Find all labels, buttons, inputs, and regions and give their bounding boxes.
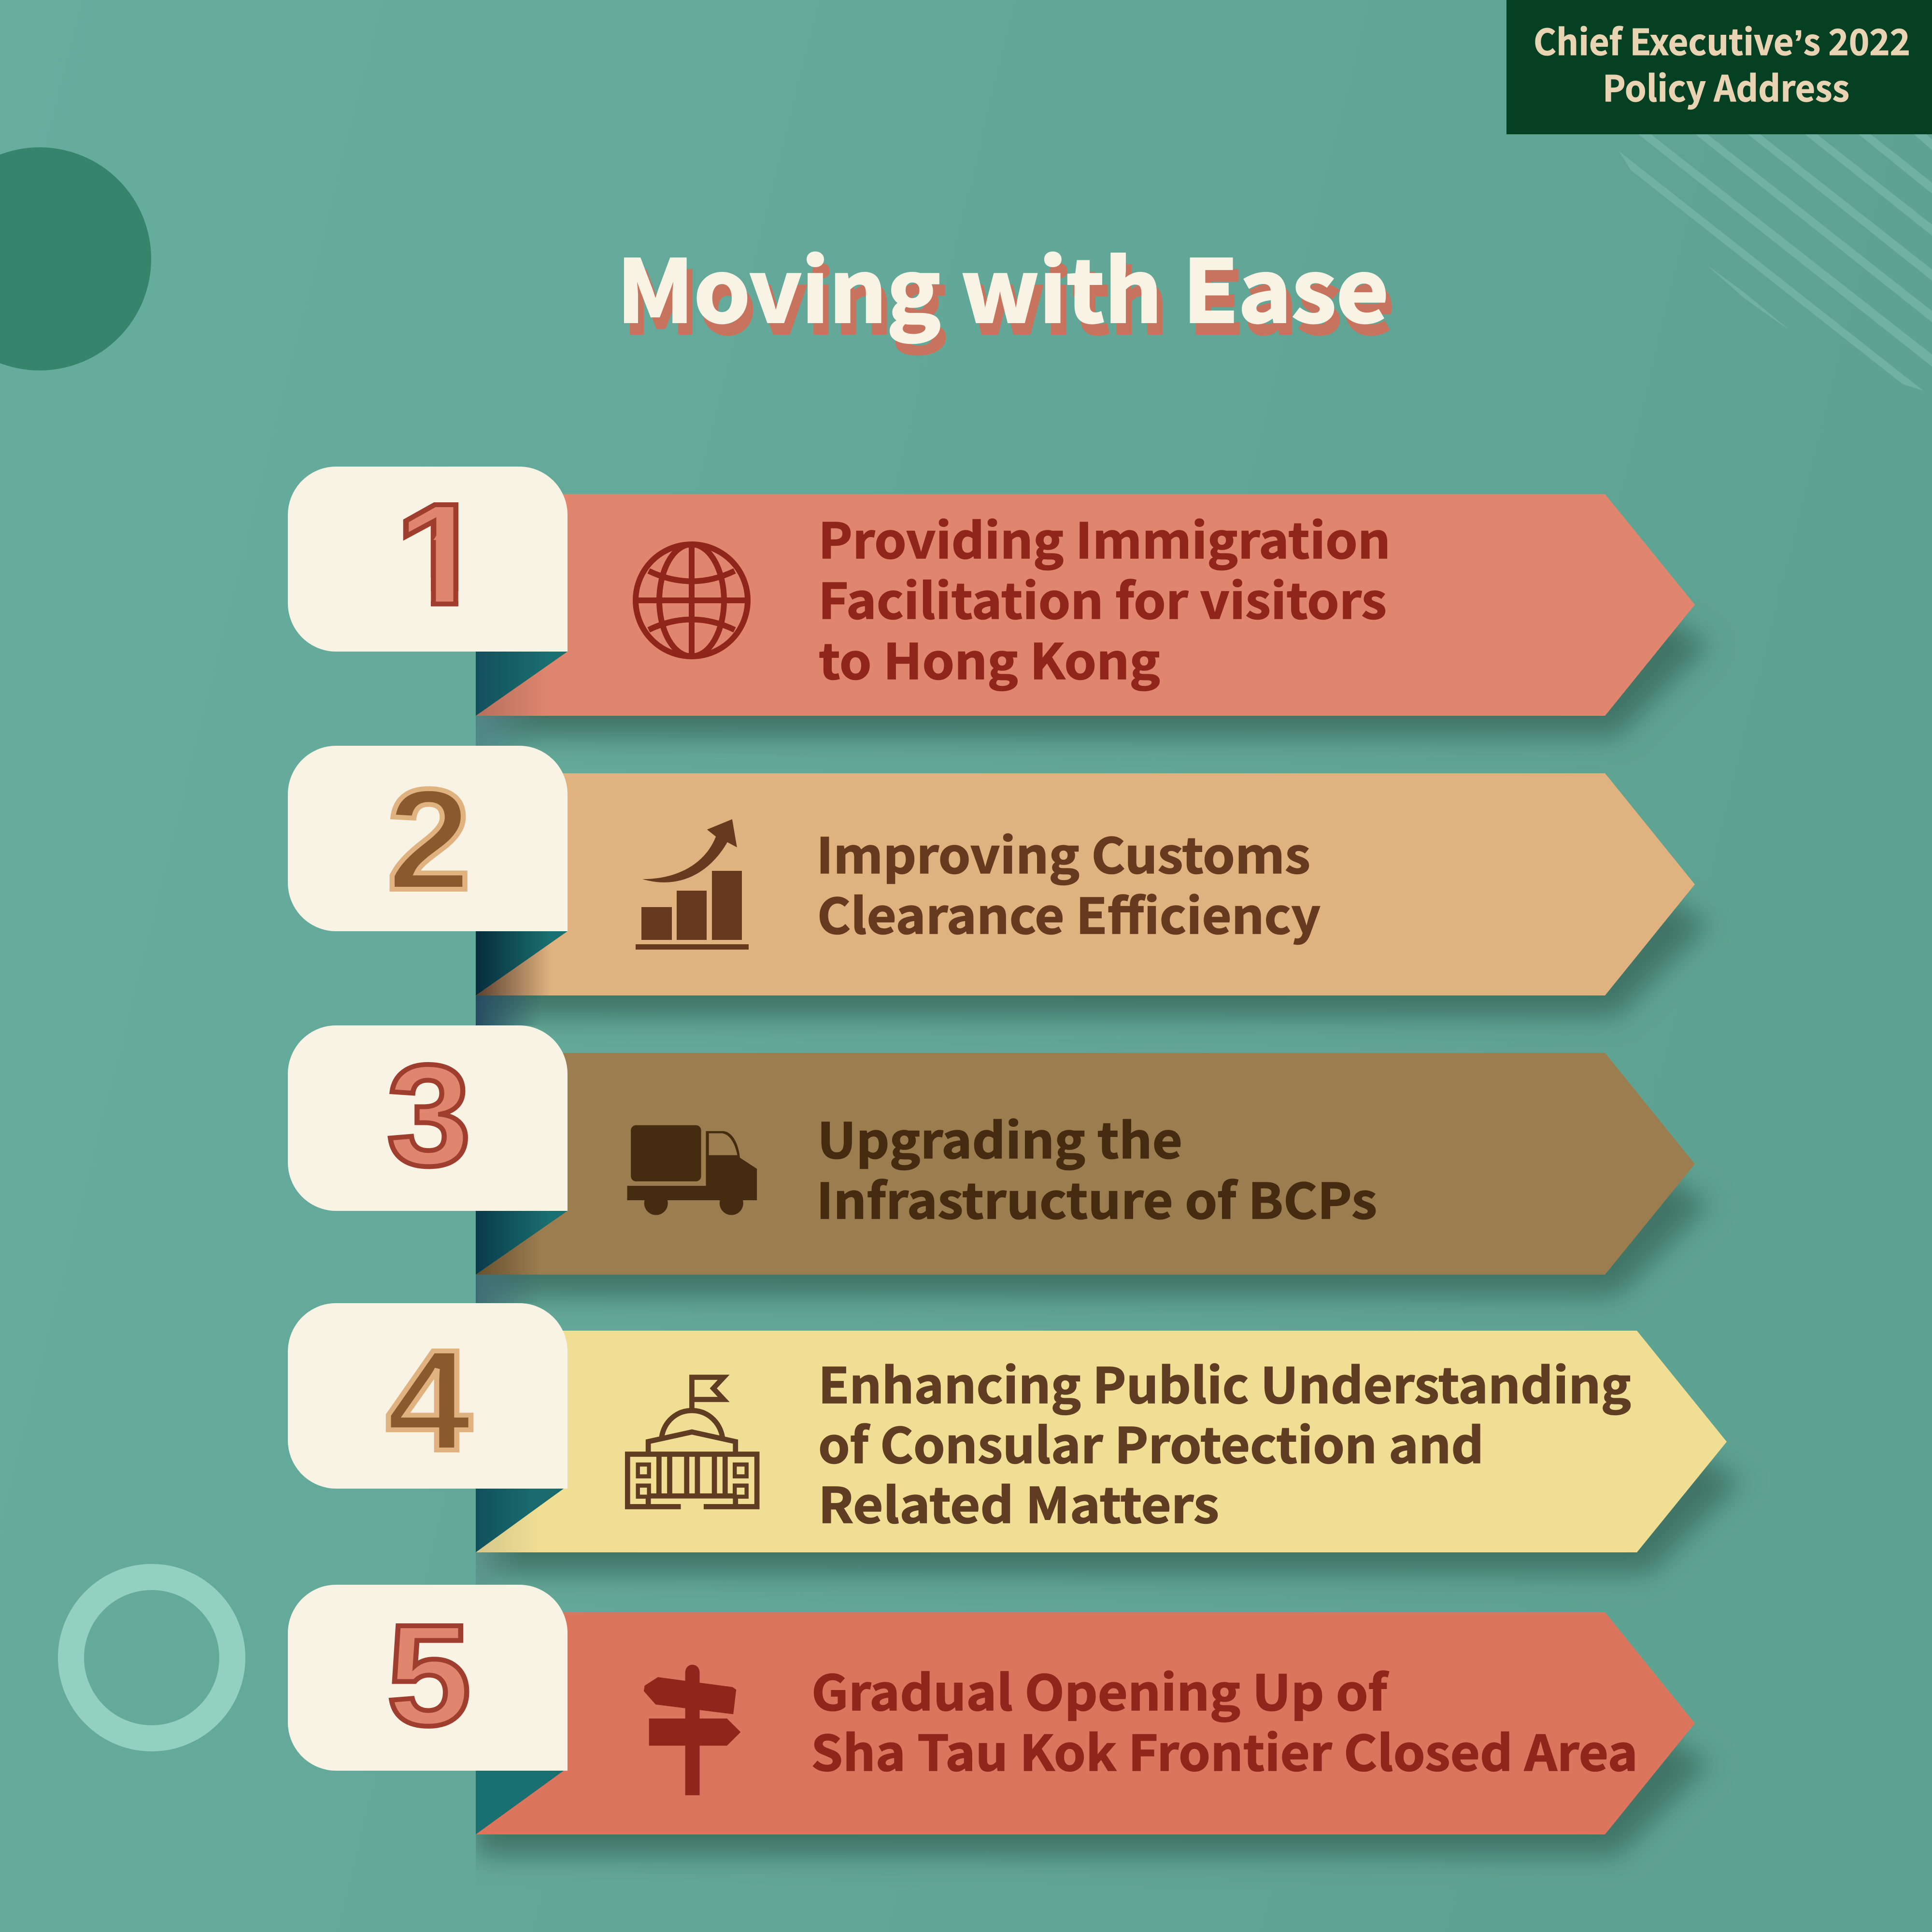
text: item 1: Facilitation for visitors bbox=[818, 563, 1387, 633]
text: item 3: Infrastructure of BCPs bbox=[816, 1163, 1377, 1233]
panel: item 4 bbox=[288, 1303, 1742, 1585]
text: item 1: Providing Immigration bbox=[818, 502, 1391, 573]
text: item 1: to Hong Kong bbox=[819, 623, 1160, 694]
text: item 2: Improving Customs bbox=[816, 817, 1310, 888]
panel: item 2 bbox=[288, 746, 1710, 1025]
number card 2 bbox=[288, 746, 568, 931]
number card 5: 5 bbox=[387, 1594, 471, 1755]
text: item 4: Related Matters bbox=[818, 1467, 1219, 1537]
panel: item 3 bbox=[288, 1025, 1710, 1303]
icon: truck bbox=[627, 1125, 757, 1215]
header banner: Chief Executive’s 2022 bbox=[1534, 14, 1910, 66]
decorative diagonal stripes bbox=[1619, 134, 1932, 391]
icon: signpost bbox=[644, 1665, 740, 1795]
decorative circle bbox=[0, 147, 151, 370]
number card 3 bbox=[288, 1025, 568, 1211]
panel: item 1 bbox=[288, 467, 1710, 746]
icon: globe bbox=[636, 544, 748, 656]
decorative ring bbox=[71, 1577, 232, 1738]
text: item 5 bbox=[811, 1654, 1638, 1785]
number card 5 bbox=[288, 1585, 568, 1771]
number card 4: 4 bbox=[386, 1321, 473, 1481]
header banner: Policy Address bbox=[1603, 60, 1849, 112]
number card 1 bbox=[288, 467, 568, 652]
text: item 3 bbox=[816, 1102, 1377, 1233]
title: Moving with Ease bbox=[623, 235, 1394, 359]
text: item 5: Sha Tau Kok Frontier Closed Area bbox=[811, 1715, 1638, 1785]
text: item 2 bbox=[816, 817, 1321, 948]
text: item 3: Upgrading the bbox=[817, 1102, 1182, 1173]
number card 1: 1 bbox=[395, 474, 487, 635]
icon: rising bar chart bbox=[636, 819, 749, 950]
number card 4 bbox=[288, 1303, 568, 1489]
text: item 4: of Consular Protection and bbox=[818, 1407, 1484, 1477]
icon: government building bbox=[627, 1378, 757, 1506]
text: item 5: Gradual Opening Up of bbox=[811, 1654, 1389, 1725]
text: item 2: Clearance Efficiency bbox=[817, 878, 1321, 948]
text: item 4 bbox=[818, 1347, 1631, 1537]
text: item 1 bbox=[818, 502, 1391, 694]
title: Moving with Ease bbox=[617, 223, 1389, 347]
number card 2: 2 bbox=[387, 759, 471, 920]
number card 3: 3 bbox=[387, 1035, 471, 1195]
text: item 4: Enhancing Public Understanding bbox=[818, 1347, 1631, 1418]
panel: item 5 bbox=[288, 1585, 1710, 1856]
header banner bbox=[1506, 0, 1932, 134]
